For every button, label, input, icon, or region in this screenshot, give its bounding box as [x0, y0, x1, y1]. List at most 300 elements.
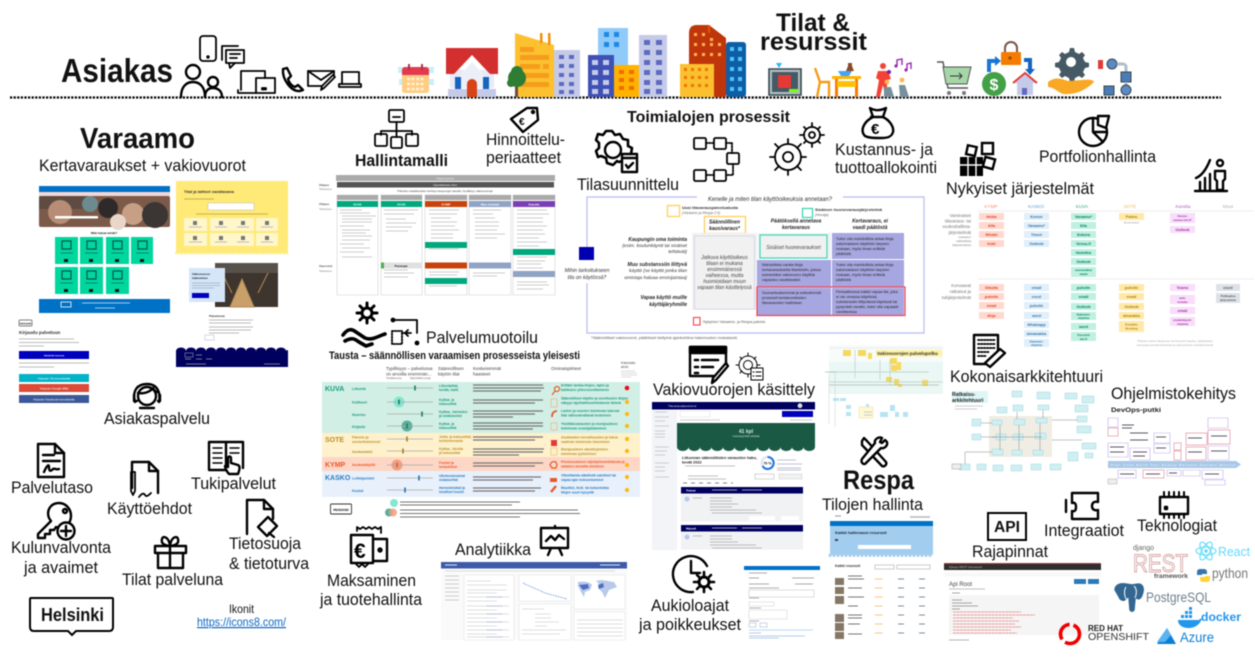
chips: KASKO: Tinovi [1031, 233, 1042, 237]
icon: handset [283, 68, 303, 91]
heading: Toimialojen prosessit: Toimialojen prosessit [627, 109, 791, 126]
chips: SOTE: Senioritoimi [1124, 220, 1140, 224]
chips: Kanslia: sisäänkäynti- [1173, 318, 1192, 322]
label: Vakiovuorojen käsittely: Vakiovuorojen käsittely [653, 380, 815, 399]
chart: access rights matrix [565, 196, 924, 340]
row label: substance use: käyttö (se käyttö jonka tilan [629, 268, 687, 274]
cell: free use, single booking: ei ole omassa käytössä, [836, 294, 878, 299]
legend: internal room booking [802, 208, 883, 218]
chips: KUVA: Kalenteri- [1077, 312, 1090, 316]
label: Palvelutaso: Palvelutaso [11, 478, 93, 497]
column: features: vaativan toiminnan tukeminen [561, 440, 610, 444]
column header: Muu toimiala: Muu toimiala [481, 202, 499, 206]
label: Maksaminen ja tuotehallinta: ja tuotehallinta [319, 590, 423, 609]
heading: Tilat & resurssit: Tilat & [776, 9, 850, 37]
row label: booking systems: vuokrahallinta- [942, 224, 972, 229]
service names: Koulut [352, 489, 364, 493]
chips: Kanslia: Huone- [1177, 214, 1188, 218]
legend: new booking platform [668, 206, 739, 216]
chips: KASKO: email [1032, 286, 1041, 290]
cell: substance, decision booking [757, 260, 831, 287]
icon: money bag: € [871, 121, 880, 138]
icon: pie chart [1079, 116, 1109, 146]
logo: Azure: Azure [1180, 629, 1214, 645]
heading: Varaamo: Varaamo [80, 123, 195, 155]
dotted divider line [10, 96, 1221, 99]
icon: headset agent [134, 384, 160, 408]
logo: Django REST framework [1133, 545, 1188, 580]
label: Kustannus- ja tuottoallokointi: tuottoallokointi [835, 158, 937, 177]
icon: lock, coin and house cycle [982, 42, 1037, 96]
sector labels: KUVA [325, 386, 344, 393]
label: Portfolionhallinta: Portfolionhallinta [1039, 147, 1156, 166]
heading: Tausta: Tausta – säännöllisen varaamisen prosesseista yleisesti [329, 350, 580, 362]
logo: Docker [1178, 607, 1241, 628]
chips: KYMP: Winkki [985, 233, 998, 237]
icon: gift [155, 537, 186, 568]
column: typical premises: sisäaluetilat [439, 478, 459, 482]
column head: regular seasonal booking [704, 216, 746, 234]
icon: API: API [994, 519, 1020, 536]
column head: regular seasonal booking: kausivaraus* [709, 226, 741, 232]
icon: gear with checklist [736, 353, 763, 380]
icon: house [446, 48, 498, 97]
column: features: näkyys lajeihallinnointistavoin tärkeä [561, 401, 621, 405]
label: Ohjelmistokehitys: Ohjelmistokehitys [1111, 384, 1236, 403]
icon: phone [200, 36, 216, 61]
cell: internal room bookings [758, 233, 831, 259]
row label: own activity [622, 237, 688, 255]
column headers: KYMP [984, 204, 998, 209]
label: Analytiikka: Analytiikka [455, 540, 532, 559]
logo: Helsinki: Helsinki [41, 605, 104, 625]
label: Hinnoitteluperiaatteet [486, 130, 565, 167]
icon: presentation board [541, 526, 568, 555]
row label: own activity: Kaupungin oma toiminta [628, 237, 687, 243]
bar: Ohjausryhmä: Ohjausryhmä [436, 176, 454, 180]
cell: own activity, single booking: päätöstä [836, 251, 852, 256]
column header: Muu toimiala [469, 201, 511, 207]
small Helsinki logo [330, 504, 352, 514]
column head: decision-based booking: kertavaraus [782, 225, 810, 231]
cell: continuous access [692, 233, 757, 310]
marker: purpose blue square [579, 247, 594, 260]
typicality sliders [387, 386, 433, 492]
chips: KASKO: Kalenteri- [1030, 340, 1043, 344]
logo: Python: python [1212, 565, 1248, 581]
icon: singer and audience [876, 59, 911, 97]
column header: KUVA second: KUVA [397, 202, 406, 206]
band: KUVA [322, 382, 640, 433]
tool boxes [1108, 418, 1230, 485]
row label: free use [640, 295, 687, 308]
chips: KYMP: Dikoita [985, 286, 999, 290]
screenshot: Django REST API root: Django REST framework [949, 565, 983, 569]
heading: Hallintamalli: Hallintamalli [355, 151, 448, 170]
title: application round: Liikunnan säännöllisten varausten haku, [682, 455, 757, 460]
column head: regular seasonal booking: Säännöllinen [709, 220, 740, 226]
label: Integraatiot: Integraatiot [1044, 521, 1124, 540]
cell: continuous access: vaiheessa, mutta [706, 273, 744, 279]
icon: hierarchy [375, 110, 418, 148]
column headers: Muut [1223, 204, 1234, 209]
column: features: toiminnan ensisijaistaminen [561, 426, 606, 430]
note: table footnote: *Palvelu toimii Varaamon tai Kursorin kautta. Lähdetiedot [1137, 339, 1213, 343]
column: typical premises: Harrastetutkat ja [439, 486, 465, 490]
heading: DevOps-putki: DevOps-putki [1111, 408, 1161, 414]
icon: city buildings red [680, 25, 746, 97]
panel: Varaamo [19, 123, 288, 403]
label: Kulunvalvonta ja avaimet: ja avaimet [23, 558, 98, 577]
icon: hand with gear [357, 303, 377, 323]
banner: green hero [677, 423, 815, 451]
chips: KUVA: näytä [1080, 272, 1088, 276]
logo: PostgreSQL [1114, 583, 1211, 612]
chips: SOTE: Outlook [1124, 305, 1140, 309]
row label: substance use: omistaja haluaa ensisijaistaa) [624, 275, 687, 281]
icon: lock, coin and house cycle: $ [990, 77, 999, 94]
column: typical premises: kentät, hallit [439, 388, 459, 392]
column: typical premises: ja kokoustilat [438, 451, 461, 455]
label: purpose of space: Mihin tarkoitukseen [565, 268, 609, 274]
chart: governance model: Ohjaus [319, 183, 330, 187]
label: Kulunvalvonta ja avaimet: Kulunvalvonta [11, 538, 111, 557]
column head: single booking without decision: vaadi päätöstä [853, 225, 888, 231]
icon: pipes workflow [1098, 59, 1131, 95]
logo: React [1196, 540, 1250, 562]
icon: shopping cart [937, 62, 971, 95]
sector labels: SOTE [325, 437, 344, 444]
panel: regular booking background table [322, 350, 640, 517]
bar: navy header: Tilavarausjärjestelmä [668, 404, 697, 408]
column headings: Säännöllisiä vuoroja [410, 377, 431, 380]
label: purpose of space: tila on käytössä? [568, 275, 606, 281]
credit: icon source: https://icons8.com/ [197, 615, 287, 629]
icon: tools [861, 437, 887, 466]
row: Nipsuli: Nipsuli [686, 526, 696, 530]
screenshot: yellow facilities page [176, 181, 288, 254]
icon: city buildings blue [588, 28, 667, 97]
cell: continuous access: vapaan tilan käsittelyssä [697, 285, 752, 291]
column: features: tilojen suuri kysyntä [561, 490, 594, 494]
cell: continuous access: Jatkuva käyttöoikeus [700, 255, 748, 261]
sector labels: KASKO [325, 475, 351, 482]
column: features: salaisen annoilla oleminen [561, 464, 604, 468]
column: typical premises: Kyläsa., ideoita [439, 447, 463, 451]
chips: Muut: Pelikaaluu [1221, 294, 1236, 298]
chips: SOTE: puhelin [1125, 286, 1139, 290]
icon: puzzle connector [1066, 493, 1098, 519]
icon: signed document [38, 444, 64, 477]
chips: KUVA: ohjelma [1078, 316, 1089, 320]
screenshot: analytics dashboard [441, 562, 627, 640]
label: Tilasuunnittelu: Tilasuunnittelu [577, 175, 679, 194]
chips: KUVA: Eurovirit [1077, 333, 1090, 337]
chart: governance model: Ohjaus [319, 202, 330, 206]
column headings: Typillisyys – palvelussa [386, 366, 433, 371]
label: Kustannus- ja tuottoallokointi: Kustannus- ja [835, 140, 934, 159]
cell: free use, decision booking: Suoraviivaisemmat ja selkeämmät [762, 290, 822, 295]
icon: process flow [694, 138, 739, 181]
label: Tilat palveluna: Tilat palveluna [122, 570, 223, 589]
chips: Kanslia: lomake [1177, 300, 1188, 304]
tag: Muu toimiala lower [513, 271, 555, 277]
column: features: Monipuolinen väestöryhmien [561, 448, 608, 452]
cell: free use, single booking: varattavissa [836, 309, 858, 314]
chips: KASKO: ohjelma [1031, 343, 1042, 347]
column headers: KUVA [1076, 204, 1089, 209]
icon: price tag [511, 108, 538, 132]
screenshot: Helsinki space photo with card [189, 263, 278, 307]
column head: single booking without decision [852, 218, 889, 231]
label: Asiakaspalvelu: Asiakaspalvelu [104, 409, 210, 428]
column: typical premises: Liikuntatilat, [439, 384, 458, 388]
row: Nipsuli [681, 525, 803, 532]
credit: icon source: Ikonit [229, 602, 255, 616]
highlight: current Varaamo and Respa service [757, 287, 905, 316]
chart: governance model [319, 175, 555, 295]
chart: governance model: Tarkastus [319, 207, 332, 211]
icon: document with gavel [247, 500, 277, 537]
chips: KASKO: word [1031, 314, 1042, 318]
tag: KYMP operating [425, 262, 467, 268]
chips: KASKO: almanakka [1027, 332, 1047, 336]
legend: current service: Nykyinen Varaamo- ja Respa-palvelu [703, 320, 765, 324]
banner: green hero: vuoropyyntöä odottaa [733, 434, 760, 438]
legend: internal room booking: Sisäinen huonevarausjärjestelmä [815, 208, 883, 212]
service names: Kirjasto [352, 425, 366, 429]
cell: continuous access: ensimmäisessä [707, 267, 742, 273]
icon: chip [1160, 492, 1188, 518]
chart: governance model: Operointi [319, 264, 332, 268]
cell: own activity, single booking [832, 233, 904, 259]
text: Kirjaudu palveluun: Kirjaudu palveluun [19, 330, 61, 335]
chips: KUVA: Varaamo* [1075, 215, 1093, 219]
column: typical premises: Kyläsa. ja [439, 398, 454, 402]
logo: Red Hat OpenShift: RED HAT [1088, 624, 1123, 633]
column: features: tilat välivuokrattavat keskeinen [561, 414, 611, 418]
chips: KASKO [1024, 213, 1049, 347]
heading: Respa: Respa [843, 465, 915, 495]
chips: KUVA: tari.fi [1080, 337, 1087, 341]
heading: Ratkaisuarkkitehtuuri: arkkitehtuuri [952, 398, 984, 404]
screenshot: regular shift handling [652, 402, 815, 550]
icon: 3D printer [769, 63, 801, 95]
chips: SOTE: Booking [1126, 326, 1138, 330]
logo: Helsinki [30, 598, 113, 635]
logo: Docker: docker [1201, 610, 1241, 624]
column: typical premises: toritoiminnasta [439, 439, 463, 443]
column head: decision-based booking [771, 218, 822, 231]
icon: key with plus [38, 503, 74, 540]
column: typical premises: kokoustilat [439, 426, 457, 430]
chips: KYMP: puhelin [985, 295, 999, 299]
label: Tietosuoja & tietoturva: Tietosuoja [229, 534, 301, 553]
column: typical premises: toriaukiolot [439, 465, 458, 469]
row label: alternative tools: ratkaisut ja [950, 289, 972, 294]
service names: Asukaskäyttö [352, 463, 376, 467]
diagram: DevOps pipeline [1108, 408, 1241, 485]
chart: governance model: Palvelun asiakkuuden kehitys kaupungin tasolla, hyväksyy vakiovuoroja [397, 189, 493, 193]
column: typical premises: Juhla- ja kokoustilat, [439, 435, 472, 439]
chips: SOTE: Ennakko [1125, 322, 1138, 326]
label: Rajapinnat: Rajapinnat [972, 542, 1048, 561]
chips: Muut [1216, 284, 1240, 303]
screenshot: opening hours [744, 566, 820, 638]
diagram: service path [825, 345, 943, 427]
button: Helsinki login: Helsinki-tunnus [44, 354, 65, 358]
cell: substance, decision booking: vapautuu varattavaksi. [762, 277, 801, 282]
column headers: KASKO [1028, 204, 1044, 209]
cell: substance, decision booking: Mahdollista varata tiloja [762, 262, 803, 267]
column: features: Viikoittaista säädöstä satelliset tai [561, 474, 616, 478]
service names: Asukastalot [352, 450, 373, 454]
row label: booking systems: Varsinaiset [950, 213, 972, 218]
chips: KYMP: email [987, 304, 996, 308]
chips: KASKO: Kursor [1030, 215, 1043, 219]
label: Hinnoitteluperiaatteet: Hinnoittelu- [486, 130, 565, 149]
button: Yle login: Kirjaudu Yle-tunnuksella [38, 376, 70, 380]
chips: KASKO: Outlook [1029, 242, 1045, 246]
label: Kustannus- ja tuottoallokointi [835, 140, 937, 177]
logo: Red Hat OpenShift [1060, 624, 1149, 644]
column header: KYMP: KYMP [442, 202, 450, 206]
cell: free use, single booking [832, 288, 904, 315]
icon: receipt with euro [351, 527, 387, 567]
heading: Ratkaisuarkkitehtuuri: Ratkaisu- [952, 392, 976, 398]
tag: Yhteistyö: Puistopä [395, 264, 408, 268]
band: KYMP [322, 457, 640, 471]
chips: KUVA: word [1078, 325, 1089, 329]
column: typical premises: Kyläsa. ja [439, 422, 454, 426]
column headings: arvio [621, 365, 628, 369]
row label: booking systems: mahdollista [956, 239, 971, 243]
chips: Kanslia: Outlook [1175, 228, 1191, 232]
column headers: SOTE [1124, 204, 1136, 209]
footnote: regular bookings: *Säännölliset vakiovuorot, päätökset tiettyinä ajankohtina hakemusten mukaisesti. [591, 336, 738, 340]
band: KASKO [322, 471, 640, 497]
cell: free use, decision booking: prosessit kertaluonteisten [762, 295, 806, 300]
chips: KUVA [1071, 213, 1096, 341]
tag: Muu toimiala operating [469, 262, 511, 268]
row label: own activity: (esim. koulunkäynti tai sisäiset [622, 243, 688, 249]
column: features: Säännöllisen käytön ja sovellusten tilojen [561, 396, 628, 400]
label: Aukioloajat ja poikkeukset: Aukioloajat [651, 596, 729, 615]
diagram: solution architecture [952, 391, 1096, 471]
icon: receipt with euro: € [354, 540, 366, 563]
cell: substance, single booking: päätöstä [836, 277, 852, 282]
chips: KUVA: Ella [1080, 224, 1088, 228]
screenshot: Respa resources [830, 516, 933, 639]
screenshot: Django REST API root [944, 563, 1101, 640]
column head: decision-based booking: Päätöksellä annetava [771, 218, 822, 224]
icon: city buildings orange [515, 33, 580, 97]
chips: SOTE: almanakka [1123, 314, 1140, 318]
tag: KUVA section [513, 249, 555, 255]
tag: KUVA lower [425, 278, 467, 284]
icon: mail with pen [308, 71, 335, 90]
column headings [386, 361, 637, 380]
column: features: toiminnan pyrkiminen [561, 452, 596, 456]
cell: substance, decision booking: kertavarauksella tilanteisiin, joissa [762, 267, 821, 272]
banner: green hero: 41 kpl [739, 429, 754, 435]
chips: KUVA: Hotellira [1076, 251, 1092, 255]
chips: KUVA: Enkora [1077, 233, 1091, 237]
cell: continuous access: huomioidaan muun [703, 279, 746, 285]
icon: price tag: € [519, 117, 525, 128]
chips: KUVA: Outlook [1076, 260, 1092, 264]
column: typical premises [438, 384, 472, 494]
boxes [959, 391, 1096, 471]
label: Käyttöehdot: Käyttöehdot [107, 499, 192, 518]
icon: money bag [863, 108, 893, 138]
row label: booking systems: (varaston [958, 235, 971, 239]
column: features: Yksittäisvarausten ja monipuolisen [561, 422, 618, 426]
label: Aukioloajat ja poikkeukset: ja poikkeukset [638, 615, 741, 634]
tag: KYMP section [425, 242, 467, 248]
icon: gear with calendar [596, 131, 637, 172]
heading: Ratkaisuarkkitehtuuri [952, 391, 988, 404]
screenshot: Varaamo front page: Mitä haluat tehdä? [91, 231, 117, 235]
column header: KUVA [337, 201, 378, 207]
chips: Kanslia: web- [1178, 296, 1186, 300]
column headers: Kanslia [1175, 204, 1191, 209]
chips: Kanslia: email [1178, 309, 1187, 313]
screenshot: navy footer [176, 348, 288, 367]
screenshot: Respa resources: Kaikki resurssit [835, 564, 861, 568]
legend: current service [694, 318, 765, 325]
column headings: Ominaispiirteet [551, 366, 582, 371]
row label: substance use: Muu substanssiin liittyvä [628, 262, 687, 268]
table: current systems [942, 204, 1254, 347]
row label: free use: Vapaa käyttö muille [640, 295, 687, 301]
screenshot: Helsinki space photo with card: Vakiovuoron [192, 272, 210, 276]
label: Tukipalvelut: Tukipalvelut [191, 474, 276, 493]
legend notes [385, 499, 580, 517]
chips: Kanslia: ohjelma [1177, 322, 1188, 326]
icon: building blocks [960, 143, 995, 176]
row label: alternative tools [942, 283, 972, 300]
chips: Kanslia: Teams [1177, 286, 1188, 290]
icon: chat bubbles [222, 46, 244, 68]
logo: Django REST framework: django [1133, 545, 1154, 552]
subheading: bookings: Kertavaraukset + vakiovuorot [39, 156, 246, 175]
label: Tilojen hallinta: Tilojen hallinta [822, 495, 924, 514]
cell: free use, decision booking: tilavarausten hallintaan [762, 300, 802, 305]
chips: KYMP: Koki [987, 242, 996, 246]
pipeline arrow: Plan Code Build Test Deploy Release Operate Monitor [1111, 463, 1236, 467]
sector labels [325, 386, 351, 482]
row label: booking systems: järjestelmät [948, 230, 972, 235]
icon: laptop [339, 72, 361, 87]
chips: SOTE [1119, 213, 1144, 332]
icon: open book with pointer [209, 442, 243, 474]
logo: Red Hat OpenShift: OPENSHIFT [1088, 632, 1149, 643]
icon: form with pen [690, 347, 728, 383]
icon: dashed process [392, 318, 418, 344]
icon: gears [770, 123, 824, 175]
column: features: Erittäin tarkka tilojen, lajien ja [561, 384, 609, 388]
button: Google login: Kirjaudu Google-tilillä [40, 386, 68, 390]
screenshot: Respa resources: Kaikki hallinnassi resurssit [835, 530, 887, 535]
column header: KYMP [425, 201, 467, 207]
column: typical premises: Kyläsa., harrastus [439, 410, 468, 414]
heading: Asiakas: Asiakas [61, 52, 173, 89]
cell: free use, decision booking [757, 288, 831, 315]
cell: substance, single booking: Tulee olla mahdollista antaa tiloja [836, 262, 894, 267]
title: application round [682, 455, 757, 464]
icon: clock with gear [673, 556, 714, 592]
